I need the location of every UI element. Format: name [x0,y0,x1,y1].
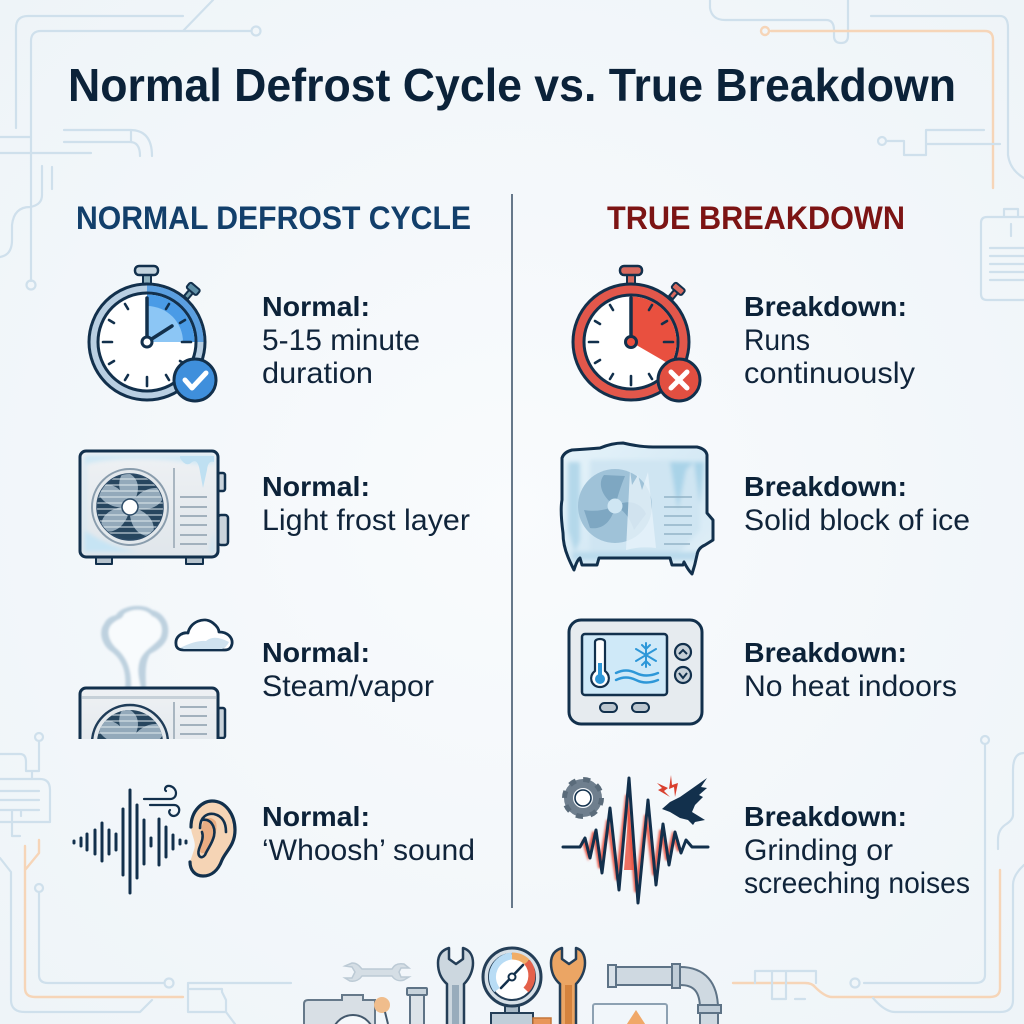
icon: unit encased in solid ice [561,443,713,574]
text: solid ice: Solid block of ice [744,504,970,537]
text: duration [262,291,420,390]
text: frost: Light frost layer [262,504,470,537]
text: steam [262,637,434,703]
text: steam: Steam/vapor [262,670,434,703]
icon: pipe stub [407,988,427,1024]
text: no heat [744,637,957,703]
text: solid ice: Breakdown: [744,471,907,502]
icon: outdoor unit with steam and cloud [78,605,234,739]
icon: grey wrench [438,948,473,1024]
panel: normal defrost cycle [74,200,475,893]
text: whoosh: Normal: [262,801,370,832]
text: steam: Normal: [262,637,370,668]
text: grinding: Grinding or [744,834,893,867]
text: runs continuously: Runs [744,324,810,357]
icon: stopwatch with x [573,266,700,401]
icon: pipe elbow [608,964,721,1024]
heading: true breakdown: TRUE BREAKDOWN [607,200,905,236]
icon: gear, grinding wave and screeching bird [563,775,708,903]
heading: normal defrost cycle: NORMAL DEFROST CYCLE [76,200,471,236]
icon: stopwatch with check [89,266,216,401]
column divider [511,194,513,908]
icon: outdoor unit with light frost [80,451,228,564]
title: Normal Defrost Cycle vs. True Breakdown [68,59,956,111]
icon: warning panel [593,1004,667,1024]
panel: true breakdown [561,200,970,903]
text: duration: 5-15 minute [262,324,420,357]
icon: sound wave and ear [74,786,235,893]
icon: small wrench [345,963,409,981]
text: no heat: No heat indoors [744,670,957,703]
text: runs continuously: continuously [744,357,915,390]
text: grinding [744,801,970,900]
text: grinding: screeching noises [744,867,970,900]
icon: thermostat [569,620,702,724]
text: duration: duration [262,357,373,390]
text: grinding: Breakdown: [744,801,907,832]
icon: toolbox [304,995,390,1024]
text: solid ice [744,471,970,537]
icon: orange wrench [551,948,585,1024]
text: whoosh: ‘Whoosh’ sound [262,834,475,867]
text: whoosh [262,801,475,867]
text: runs continuously: Breakdown: [744,291,907,322]
text: runs continuously [744,291,915,390]
bottom tools strip [304,948,721,1024]
text: no heat: Breakdown: [744,637,907,668]
text: frost [262,471,470,537]
text: frost: Normal: [262,471,370,502]
text: duration: Normal: [262,291,370,322]
icon: pressure gauge [483,948,551,1024]
